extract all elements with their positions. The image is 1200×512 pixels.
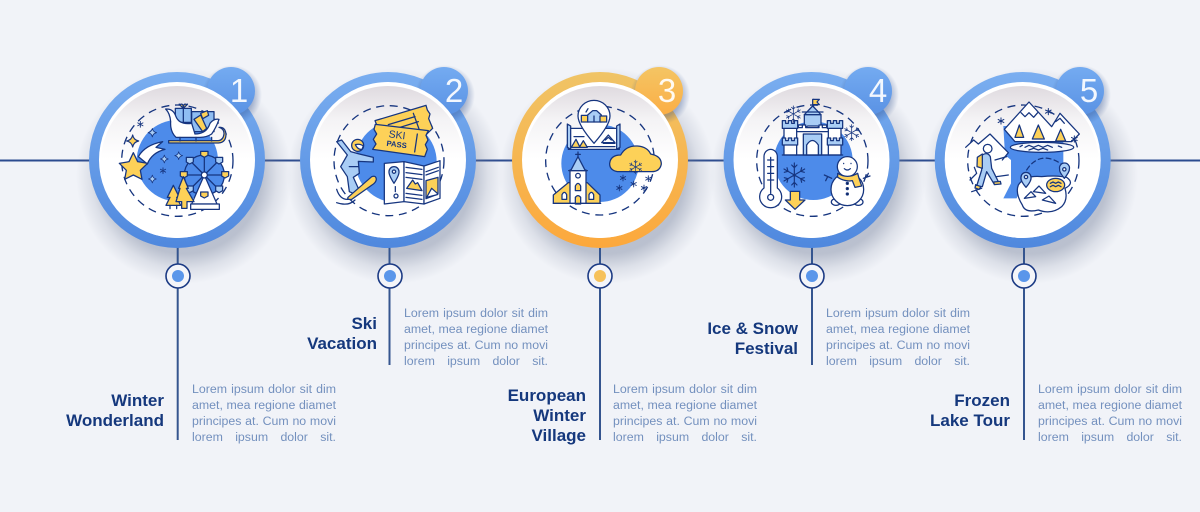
text block: step 1 description: amet, mea regione diamet [192, 398, 336, 412]
badge: number 1: 1 [230, 72, 248, 109]
text block: step 1 description: lorem ipsum dolor sit. [192, 430, 336, 444]
badge: number 5: 5 [1080, 72, 1098, 109]
heading: Ski Vacation: Ski [351, 314, 377, 333]
panel: step 5 circle [922, 65, 1138, 440]
text block: step 4 description [826, 306, 970, 368]
heading: Ice and Snow Festival [707, 319, 798, 358]
text block: step 3 description: Lorem ipsum dolor sit dim [613, 382, 757, 396]
icon: ice and snow festival [757, 99, 870, 216]
text block: step 2 description: Lorem ipsum dolor sit dim [404, 306, 548, 320]
heading: Winter Wonderland: Winter [111, 391, 164, 410]
icon: winter wonderland [119, 104, 233, 216]
badge: number 2 [420, 67, 468, 115]
timeline axis [0, 160, 1200, 162]
icon: european winter village [546, 100, 661, 215]
icon: ski vacation [334, 105, 444, 216]
panel: step 1 circle [76, 65, 292, 440]
badge: number 3 [635, 67, 683, 115]
text block: step 4 description: lorem ipsum dolor sit. [826, 354, 970, 368]
heading: Ice and Snow Festival: Festival [735, 339, 798, 358]
heading: Ice and Snow Festival: Ice & Snow [707, 319, 798, 338]
text block: step 5 description [1038, 382, 1182, 444]
text block: step 1 description: Lorem ipsum dolor sit dim [192, 382, 336, 396]
icon: frozen lake tour [966, 102, 1079, 216]
heading: Ski Vacation [307, 314, 377, 353]
heading: Winter Wonderland [66, 391, 164, 430]
badge: number 1 [207, 67, 255, 115]
badge: number 4: 4 [869, 72, 887, 109]
heading: Frozen Lake Tour: Frozen [954, 391, 1010, 410]
text block: step 5 description: Lorem ipsum dolor sit dim [1038, 382, 1182, 396]
connector node 3 [588, 264, 612, 288]
heading: European Winter Village [508, 386, 586, 445]
heading: Frozen Lake Tour [930, 391, 1010, 430]
text block: step 1 description: principes at. Cum no movi [192, 414, 336, 428]
text block: step 2 description: lorem ipsum dolor sit. [404, 354, 548, 368]
badge: number 5 [1056, 67, 1104, 115]
text block: step 3 description: amet, mea regione diamet [613, 398, 757, 412]
text block: step 2 description: amet, mea regione diamet [404, 322, 548, 336]
text block: step 5 description: lorem ipsum dolor sit. [1038, 430, 1182, 444]
heading: Frozen Lake Tour: Lake Tour [930, 411, 1010, 430]
connector node 1 [166, 264, 190, 288]
panel: step 3 circle [499, 65, 715, 440]
text block: step 2 description [404, 306, 548, 368]
text block: step 1 description [192, 382, 336, 444]
text block: step 3 description [613, 382, 757, 444]
badge: number 2: 2 [445, 72, 463, 109]
connector node 2 [378, 264, 402, 288]
heading: European Winter Village: Village [532, 426, 586, 445]
text block: step 4 description: Lorem ipsum dolor sit dim [826, 306, 970, 320]
panel: step 4 circle [710, 65, 926, 365]
text block: step 5 description: principes at. Cum no movi [1038, 414, 1182, 428]
heading: European Winter Village: European [508, 386, 586, 405]
badge: number 4 [844, 67, 892, 115]
icon: ski vacation: PASS [386, 139, 407, 150]
heading: Ski Vacation: Vacation [307, 334, 377, 353]
text block: step 2 description: principes at. Cum no movi [404, 338, 548, 352]
connector node 5 [1012, 264, 1036, 288]
text block: step 3 description: principes at. Cum no movi [613, 414, 757, 428]
text block: step 4 description: amet, mea regione diamet [826, 322, 970, 336]
panel: step 2 circle [287, 65, 503, 365]
connector node 4 [800, 264, 824, 288]
text block: step 3 description: lorem ipsum dolor sit. [613, 430, 757, 444]
text block: step 4 description: principes at. Cum no movi [826, 338, 970, 352]
text block: step 5 description: amet, mea regione diamet [1038, 398, 1182, 412]
icon: ski vacation: SKI [388, 129, 406, 142]
badge: number 3: 3 [658, 72, 676, 109]
heading: Winter Wonderland: Wonderland [66, 411, 164, 430]
heading: European Winter Village: Winter [533, 406, 586, 425]
